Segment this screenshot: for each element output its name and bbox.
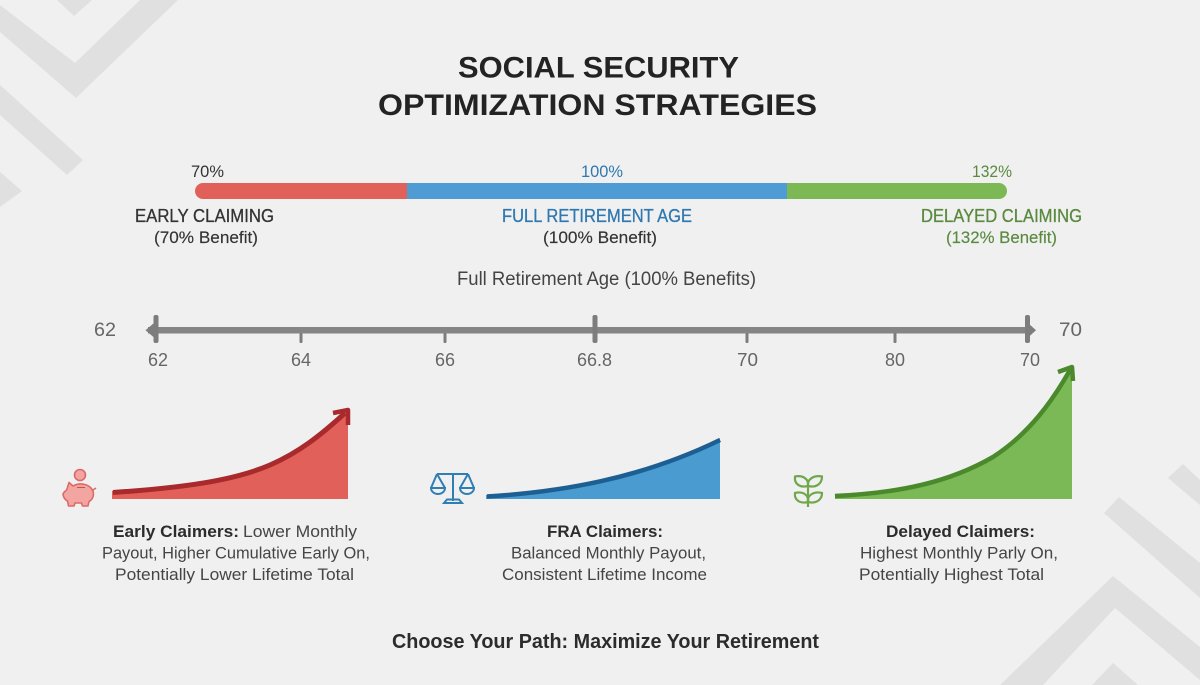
text: early claimers: Lower Monthly — [243, 522, 358, 541]
benefit label: full retirement age: (100% Benefit) — [543, 228, 657, 247]
icon: balance scales — [431, 474, 474, 503]
benefit label: early claiming: (70% Benefit) — [154, 228, 258, 247]
benefit label: delayed claiming: 132% — [972, 162, 1012, 181]
title: OPTIMIZATION STRATEGIES — [378, 89, 817, 122]
text: fra claimers — [502, 522, 707, 584]
benefit label: delayed claiming: (132% Benefit) — [946, 228, 1057, 247]
age timeline: 66 — [435, 350, 455, 370]
timeline caption: Full Retirement Age (100% Benefits) — [457, 269, 756, 290]
chart: fra claimers curve — [486, 438, 720, 499]
chart: delayed claimers curve — [835, 367, 1073, 499]
title — [378, 52, 817, 122]
age timeline: 70 — [1059, 320, 1082, 341]
age timeline — [94, 315, 1082, 370]
footer tagline: Choose Your Path: Maximize Your Retirement — [392, 631, 819, 653]
text: early claimers: Early Claimers: — [113, 522, 239, 541]
age timeline: 62 — [148, 350, 168, 370]
benefit label: early claiming — [135, 162, 274, 247]
icon: piggy bank — [63, 470, 96, 506]
text: fra claimers: Consistent Lifetime Income — [502, 565, 707, 584]
text: delayed claimers — [859, 522, 1058, 584]
age timeline: 66.8 — [577, 350, 612, 370]
chart: early claimers curve — [112, 410, 348, 499]
benefit label: full retirement age: 100% — [581, 162, 623, 181]
benefit label: early claiming: EARLY CLAIMING — [135, 206, 274, 226]
benefit bar — [195, 183, 1007, 199]
age timeline: 64 — [291, 350, 311, 370]
benefit label: early claiming: 70% — [191, 162, 224, 181]
text: delayed claimers: Highest Monthly Parly On, — [860, 544, 1058, 562]
text: early claimers: Potentially Lower Lifetime Total — [115, 565, 354, 584]
text: delayed claimers: Potentially Highest Total — [859, 565, 1044, 584]
age timeline: 62 — [94, 320, 116, 341]
benefit label: delayed claiming — [921, 162, 1082, 247]
icon: plant sprout — [795, 476, 822, 507]
age timeline: 80 — [885, 350, 905, 370]
text: fra claimers: Balanced Monthly Payout, — [511, 544, 706, 562]
text: fra claimers: FRA Claimers: — [547, 522, 663, 541]
age timeline: 70 — [737, 350, 758, 370]
title: SOCIAL SECURITY — [458, 52, 739, 84]
text: early claimers: Payout, Higher Cumulative Early On, — [102, 544, 370, 562]
text: early claimers — [102, 522, 370, 584]
text: delayed claimers: Delayed Claimers: — [886, 522, 1035, 541]
benefit label: full retirement age: FULL RETIREMENT AGE — [502, 206, 692, 226]
benefit label: delayed claiming: DELAYED CLAIMING — [921, 206, 1082, 226]
age timeline: 70 — [1020, 350, 1040, 370]
benefit label: full retirement age — [502, 162, 692, 247]
